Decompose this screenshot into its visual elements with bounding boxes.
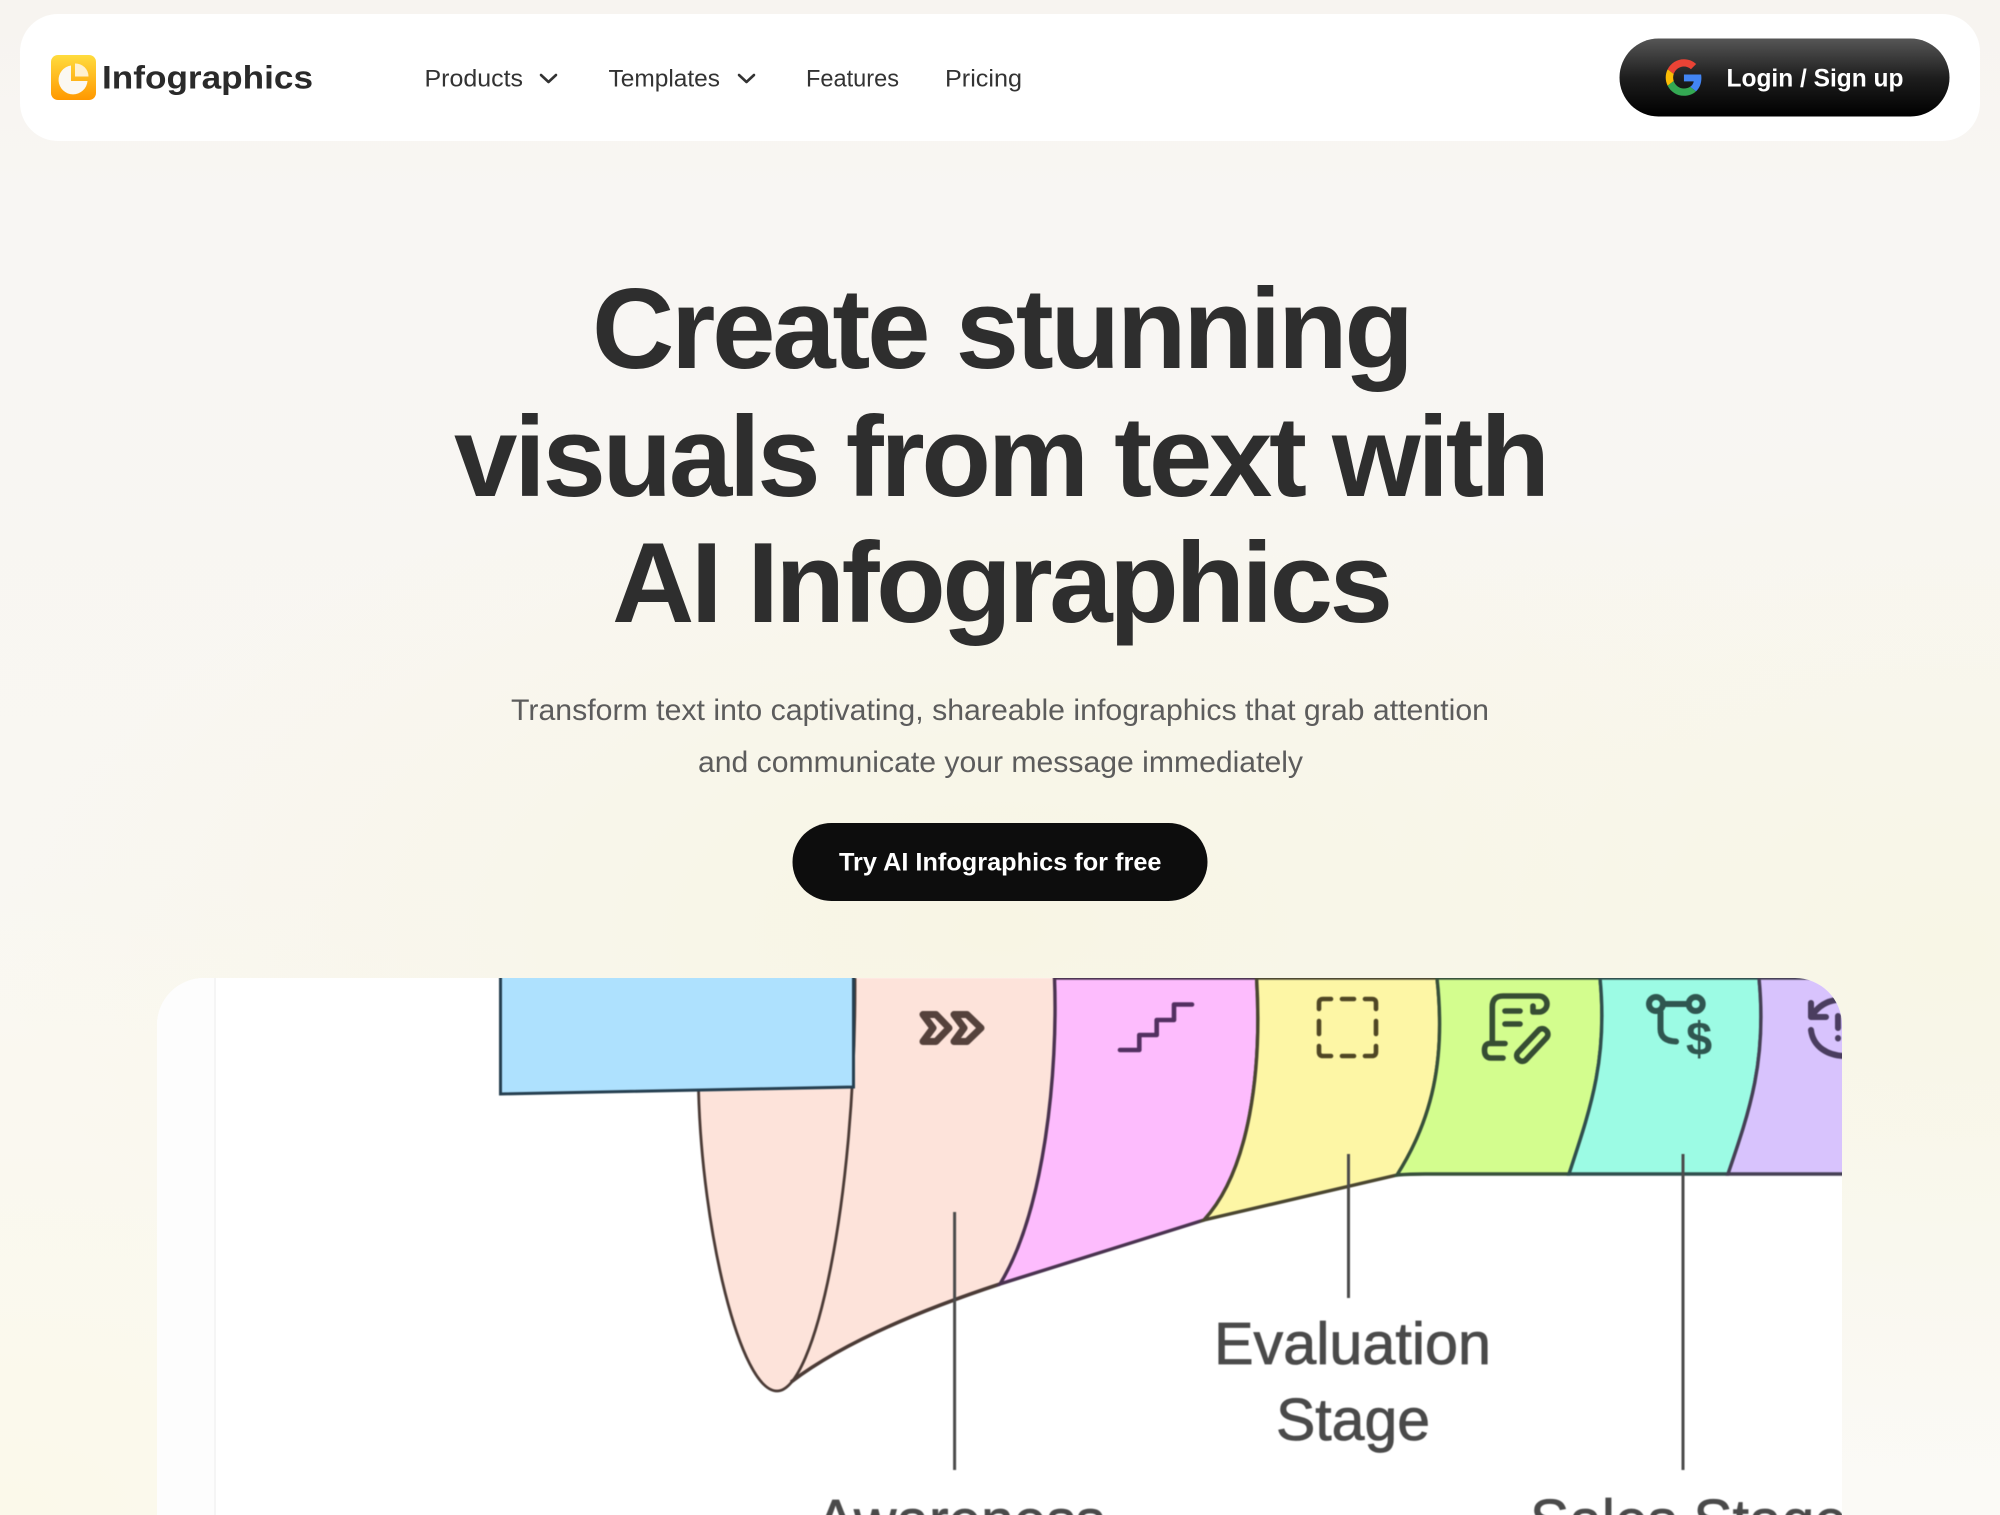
funnel segment: awareness — [698, 978, 1055, 1391]
leader line: awareness — [953, 1212, 956, 1470]
funnel segment: retention — [1726, 978, 1842, 1176]
navigation bar — [20, 14, 1980, 141]
icon: stairs — [1120, 1004, 1192, 1050]
label: evaluation stage — [1214, 1311, 1491, 1453]
label: evaluation stage: Evaluation — [1214, 1311, 1491, 1377]
title: Create stunning — [592, 266, 1414, 393]
funnel diagram — [500, 970, 1860, 1515]
subtitle — [511, 694, 1489, 779]
title — [454, 266, 1550, 647]
blue rectangle — [500, 970, 854, 1094]
title: visuals from text with — [454, 394, 1550, 521]
label: evaluation stage: Stage — [1276, 1387, 1430, 1453]
login button: Login / Sign up — [1726, 64, 1904, 92]
icon: dashed square — [1319, 999, 1376, 1056]
funnel segment: negotiation — [1397, 978, 1602, 1175]
subtitle: and communicate your message immediately — [698, 746, 1303, 779]
icon: double chevron — [923, 1014, 981, 1042]
brand name: Infographics — [102, 60, 313, 96]
nav item: Features: Features — [806, 66, 899, 92]
call-to-action button — [792, 823, 1208, 901]
icon: scroll and pencil — [1484, 996, 1550, 1063]
login button — [1620, 38, 1950, 116]
icon: Google G — [1666, 59, 1701, 96]
nav item: Pricing: Pricing — [945, 66, 1022, 92]
icon: route with dollar: $ — [1686, 1012, 1712, 1065]
leader line: evaluation — [1347, 1154, 1350, 1298]
icon: refresh alert — [1811, 1000, 1846, 1056]
nav item: Products: Products — [424, 66, 523, 92]
funnel segment: interest — [1000, 978, 1258, 1284]
funnel segment: sales — [1569, 978, 1761, 1174]
panel: funnel preview card — [157, 970, 1860, 1515]
funnel segment: evaluation — [1204, 978, 1440, 1220]
title: AI Infographics — [612, 520, 1393, 647]
subtitle: Transform text into captivating, shareable infographics that grab attention — [511, 694, 1489, 727]
icon: route with dollar — [1649, 997, 1712, 1065]
nav item: Templates: Templates — [608, 66, 720, 92]
call-to-action button: Try AI Infographics for free — [839, 848, 1162, 876]
leader line: sales — [1682, 1154, 1684, 1470]
icon: logo — [51, 55, 96, 100]
